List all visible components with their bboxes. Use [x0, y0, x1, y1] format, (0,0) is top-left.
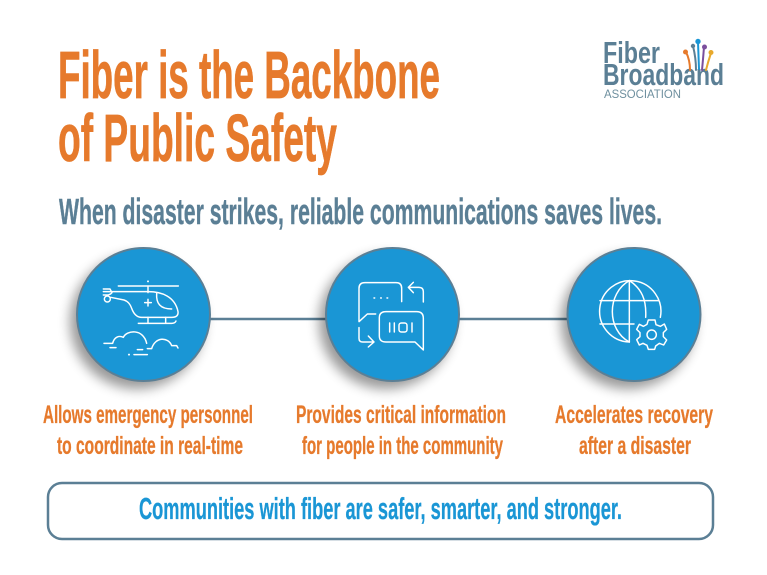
caption 2: Provides critical information — [296, 401, 506, 429]
title: of Public Safety — [58, 101, 337, 176]
circle 3 shadow — [561, 255, 695, 389]
caption 1 — [43, 401, 253, 460]
circle 1 — [77, 248, 210, 381]
title: Fiber is the Backbone — [58, 38, 440, 113]
caption 3 — [555, 401, 713, 460]
circle 3 — [568, 248, 700, 381]
logo: Fiber Broadband Association: ASSOCIATION — [604, 87, 681, 101]
connector lines — [205, 318, 572, 320]
circle 2 — [326, 248, 459, 381]
icon: chat bubbles with arrows — [359, 282, 423, 350]
caption 1: Allows emergency personnel — [43, 401, 253, 429]
caption 3: after a disaster — [579, 432, 691, 460]
icon: helicopter and clouds — [103, 280, 178, 356]
title — [58, 38, 440, 176]
step 3: recovery — [561, 248, 700, 389]
circle 1 shadow — [70, 255, 204, 389]
step 2: information — [319, 248, 459, 389]
step 1: coordinate — [70, 248, 210, 389]
callout box — [48, 483, 713, 539]
caption 2: for people in the community — [302, 432, 503, 460]
caption 1: to coordinate in real-time — [57, 432, 243, 460]
circle 2 shadow — [319, 255, 453, 389]
caption 2 — [296, 401, 506, 460]
icon: globe with gear — [600, 281, 667, 349]
logo: Fiber Broadband Association: Fiber — [603, 35, 660, 70]
logo: Fiber Broadband Association — [603, 35, 724, 101]
logo: Fiber Broadband Association: Broadband — [603, 57, 724, 92]
